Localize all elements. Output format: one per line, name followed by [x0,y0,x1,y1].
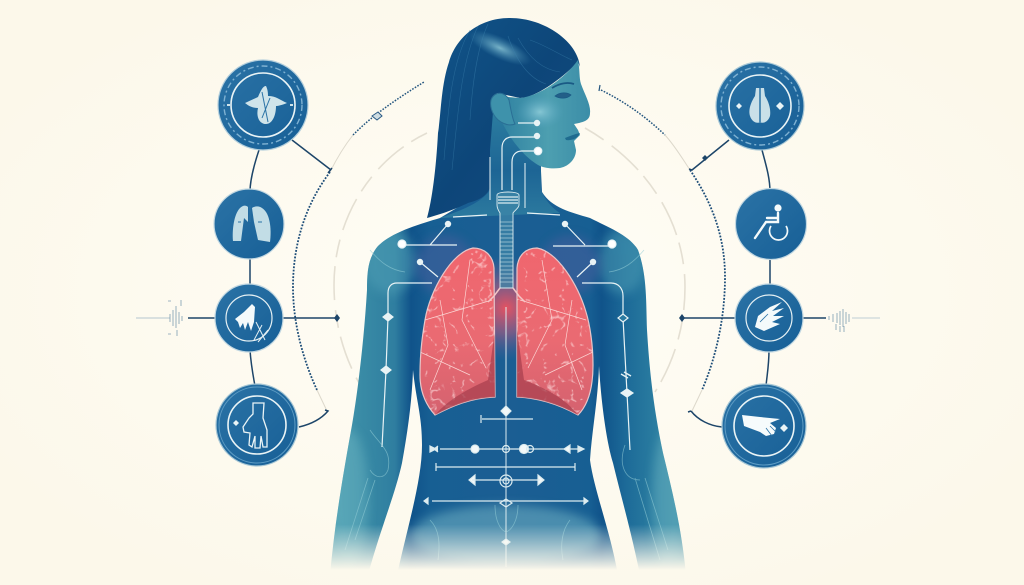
body shading [332,230,684,570]
face [497,60,590,168]
left shoulder circuit [381,215,487,447]
icon circle: pointing hand, right [722,384,806,468]
icon circle: wheelchair, right [736,188,806,260]
connector lines [188,140,826,427]
right lung [516,247,594,416]
hair strands [444,24,572,170]
dashed inner arcs [334,128,685,392]
cheek highlight [522,100,556,124]
abdomen circuit [424,307,588,567]
neck [440,114,560,218]
icon circle: hand outline, left [216,384,298,466]
trachea [488,192,525,302]
left dotted arc [293,82,424,411]
hair highlight [472,32,528,64]
arm bones and pelvis [345,250,668,560]
hair [427,18,580,218]
left signal wave [136,300,182,336]
right signal wave [829,309,880,332]
ear [491,93,515,125]
icon circle: lungs, top right [716,62,804,150]
icon circle: hand drip, left [215,284,283,352]
neck circuit lines [490,120,542,208]
lung glow [494,260,518,356]
body silhouette [330,150,686,575]
icon circle: heart, top left [218,60,308,150]
right dotted arc [599,85,725,411]
figure [330,18,686,575]
icon circle: lungs, left [214,189,284,259]
marker dots on connectors [334,155,708,322]
icon circle: open hand, right [735,284,803,352]
infographic canvas [136,18,880,568]
eye and brow [552,83,574,98]
left lung [419,247,496,416]
right shoulder circuit [527,213,633,450]
lips [565,133,580,140]
